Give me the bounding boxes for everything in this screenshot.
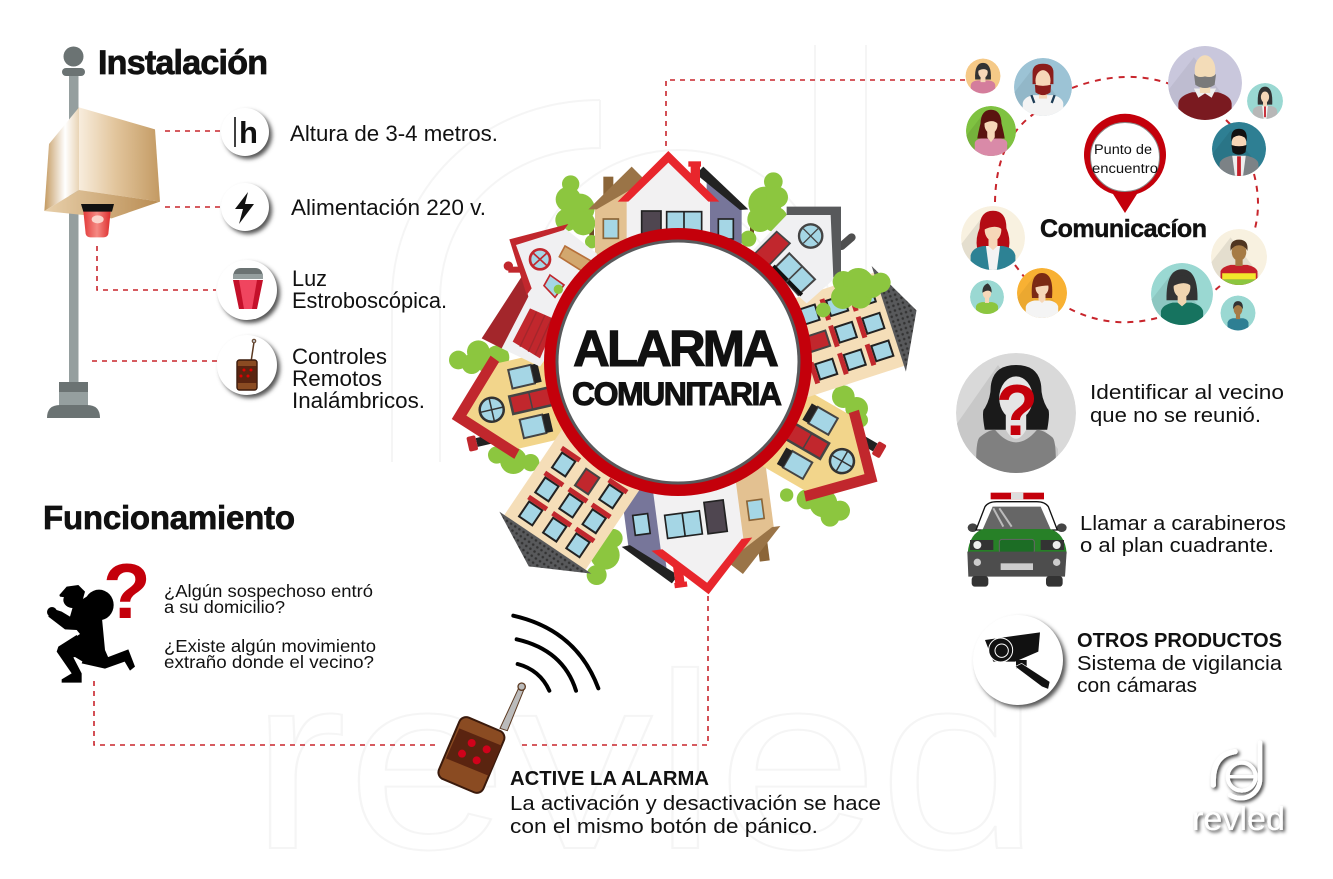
text: remote controls: Inalámbricos. [292, 388, 425, 413]
text: other products: OTROS PRODUCTOS [1077, 630, 1282, 652]
alarm box [44, 107, 160, 237]
icon: height: h [239, 115, 258, 150]
logo: revled [1192, 743, 1285, 837]
text: call police [1080, 512, 1286, 557]
house: top [588, 151, 748, 280]
icon: red question mark: ? [103, 547, 151, 635]
text: suspicious questions: ¿Algún sospechoso entró [164, 581, 373, 601]
house: right yellow [736, 369, 904, 528]
text: activate the alarm: ACTIVE LA ALARMA [510, 768, 709, 790]
dashed meeting circle [995, 77, 1258, 322]
icon: power [221, 183, 272, 234]
text: suspicious questions: extraño donde el vecino? [164, 652, 374, 672]
person 9 [1017, 268, 1067, 318]
text: remote controls: Controles [292, 344, 387, 369]
text: strobe light: Estroboscópica. [292, 288, 447, 313]
heading: Funcionamiento: Funcionamiento [43, 499, 295, 536]
text: identify neighbour: Identificar al vecino [1090, 381, 1284, 404]
house: bottom [612, 456, 788, 605]
watermark: revled [250, 45, 1040, 879]
person 7 [961, 206, 1025, 270]
central title line 2: COMUNITARIA [572, 376, 782, 412]
icon: red question mark on woman: ? [996, 371, 1038, 451]
icon: police car [967, 493, 1067, 587]
apartment: lower left [483, 409, 661, 598]
person 3 [966, 106, 1016, 156]
white disc [558, 242, 798, 482]
text: other products: Sistema de vigilancia [1077, 653, 1283, 675]
text: remote controls [292, 344, 425, 413]
icon: unknown neighbour [956, 353, 1076, 473]
person 12 [1220, 296, 1256, 330]
map pin: meeting point [1084, 114, 1166, 213]
text: call police: Llamar a carabineros [1080, 512, 1286, 535]
icon: large remote control [436, 683, 525, 795]
person 10 [1151, 263, 1213, 325]
connector: burglar to remote [94, 681, 436, 745]
text: strobe light [292, 266, 447, 313]
icon: burglar silhouette [47, 585, 135, 683]
icon: security camera [973, 615, 1066, 708]
text: other products [1077, 630, 1283, 697]
person 2 [1014, 58, 1072, 116]
heading: Instalación: Instalación [98, 44, 268, 82]
text: power: Alimentación 220 v. [291, 195, 486, 220]
icon: remote control [217, 335, 280, 398]
pole with alarm box [44, 46, 160, 418]
text: other products: con cámaras [1077, 675, 1197, 697]
logo: revled: revled [1192, 800, 1285, 837]
central house ring illustration [440, 151, 933, 605]
text: identify neighbour [1090, 381, 1284, 427]
person 8 [970, 280, 1004, 314]
icon: strobe light [217, 260, 280, 323]
icon: signal waves [513, 616, 598, 691]
text: call police: o al plan cuadrante. [1080, 534, 1274, 557]
central title line 1: ALARMA [573, 320, 779, 377]
connector: house to remote [518, 596, 708, 745]
text: height: Altura de 3-4 metros. [290, 121, 498, 146]
red ring [544, 228, 812, 496]
person 5 [1247, 83, 1283, 119]
map pin: meeting point: encuentro [1092, 161, 1158, 176]
heading: Comunicación: Comunicacíon [1040, 215, 1207, 243]
pole [47, 46, 100, 418]
text: activate the alarm: La activación y desactivación se hace [510, 792, 881, 815]
text: identify neighbour: que no se reunió. [1090, 404, 1261, 427]
text: suspicious questions: a su domicilio? [164, 597, 285, 617]
text: suspicious questions [164, 581, 376, 672]
connectors: installation items [92, 131, 220, 361]
trees behind the houses [449, 172, 868, 585]
grey inner ring [556, 240, 800, 484]
text: remote controls: Remotos [292, 366, 382, 391]
map pin: meeting point: Punto de [1094, 142, 1152, 157]
text: strobe light: Luz [292, 266, 327, 291]
person 4 [1168, 46, 1242, 120]
person 6 [1212, 122, 1266, 176]
person 11 [1211, 229, 1267, 285]
text: suspicious questions: ¿Existe algún movimiento [164, 636, 376, 656]
text: activate the alarm: con el mismo botón de pánico. [510, 815, 818, 838]
trees in front of apartment [816, 268, 891, 317]
house: left yellow [440, 337, 593, 471]
person 1 [966, 58, 1000, 94]
connector: central house to communication [666, 80, 965, 146]
icon: height [221, 108, 272, 159]
house: upper right gray and upper left red [482, 207, 852, 367]
apartment: right [754, 257, 933, 410]
text: activate the alarm [510, 768, 881, 838]
